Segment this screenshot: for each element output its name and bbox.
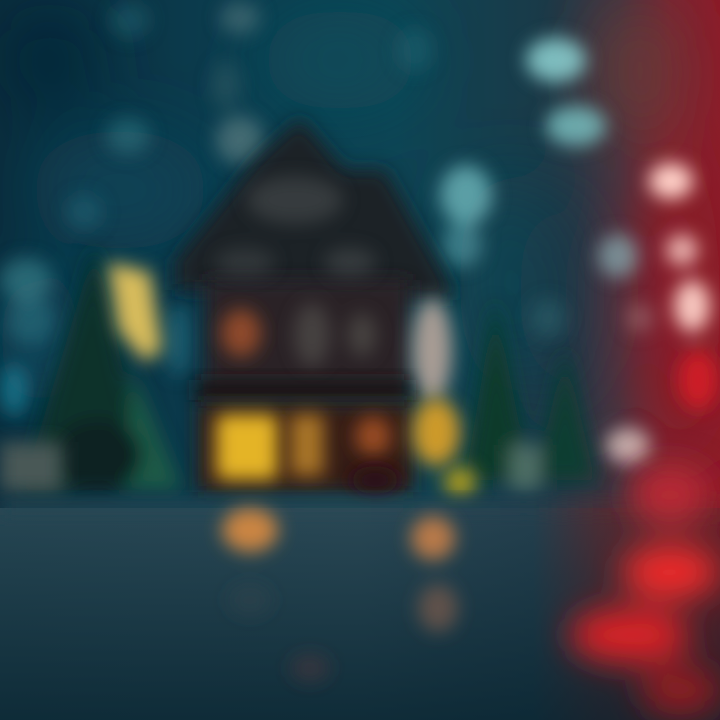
background: sky tonal patches xyxy=(0,0,720,470)
house xyxy=(175,118,476,498)
bokeh: pale teal rain highlights xyxy=(0,2,638,416)
house: roof timber highlights xyxy=(215,176,376,367)
house: ground floor xyxy=(198,402,413,492)
house: lit door xyxy=(290,414,324,476)
wall: grey block at far left xyxy=(0,442,62,492)
trees: right conifer group xyxy=(465,300,595,490)
house: yellow side light xyxy=(412,398,460,466)
house: yellow-green shrub xyxy=(444,466,476,498)
house: dark door base xyxy=(351,466,399,494)
glow: yellow lit panel beside tree xyxy=(108,262,162,362)
reflections: house lights in the wet ground xyxy=(222,508,458,682)
house: upper left window xyxy=(221,309,261,357)
house: pale side wall xyxy=(412,298,452,402)
bokeh: red and white lights on the right xyxy=(606,163,718,464)
house: eave shadow xyxy=(195,380,410,400)
house: upper wall xyxy=(205,280,410,390)
reflections: red lights on the wet ground xyxy=(570,465,720,716)
house: roof xyxy=(175,118,450,300)
house: small orange window xyxy=(355,416,391,456)
trees: left conifer group xyxy=(22,245,182,491)
ground: wet reflective pavement xyxy=(0,500,720,720)
house: large lit window xyxy=(216,414,278,480)
